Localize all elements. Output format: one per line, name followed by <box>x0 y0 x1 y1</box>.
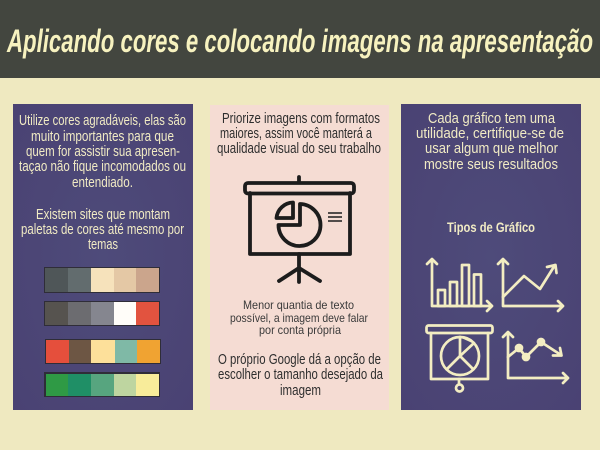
text block: utilidade dos gráficos: Cada gráfico tem uma <box>428 111 556 127</box>
text block: cores agradáveis: entendiado. <box>72 175 133 191</box>
text block: sites de paletas: paletas de cores até mesmo por <box>21 222 184 238</box>
text block: formatos maiores: maiores, assim você manterá a <box>220 126 373 142</box>
palette 4 <box>44 372 160 397</box>
text block: cores agradáveis: taçao não fique incomodados ou <box>19 159 186 175</box>
panel: gráficos <box>401 104 581 410</box>
icon: dotted line chart <box>503 332 568 383</box>
text block: sites de paletas: temas <box>88 237 118 253</box>
text block: sites de paletas <box>21 207 184 253</box>
text block: opção do Google: O próprio Google dá a opção de <box>218 352 381 368</box>
palette 2 <box>44 301 160 326</box>
text block: cores agradáveis: Utilize cores agradáveis, elas são <box>19 113 186 129</box>
header band <box>0 0 600 78</box>
text block: formatos maiores <box>217 111 381 157</box>
text block: opção do Google: escolher o tamanho desejado da <box>218 367 384 383</box>
palette 1 <box>44 267 160 293</box>
text block: utilidade dos gráficos: mostre seus resultados <box>424 157 558 173</box>
text block: formatos maiores: qualidade visual do seu trabalho <box>217 141 381 157</box>
panel: cores <box>13 104 193 410</box>
icon: presentation board with pie <box>426 326 492 392</box>
caption: menos texto: possível, a imagem deve falar <box>230 311 368 325</box>
heading: tipos de gráfico: Tipos de Gráfico <box>447 219 535 235</box>
palette 3 <box>45 339 161 364</box>
icon: bar chart <box>427 259 492 311</box>
icon: projector with pie chart <box>245 177 354 282</box>
caption: menos texto: por conta própria <box>259 323 341 337</box>
text block: sites de paletas: Existem sites que montam <box>36 207 170 223</box>
caption: menos texto <box>230 298 368 337</box>
text block: cores agradáveis: muito importantes para que <box>31 129 174 145</box>
text block: opção do Google: imagem <box>280 383 321 399</box>
text block: utilidade dos gráficos: usar algum que melhor <box>425 141 558 157</box>
text block: opção do Google <box>218 352 384 399</box>
text block: utilidade dos gráficos <box>416 111 564 173</box>
icon: line chart <box>498 259 563 311</box>
text block: cores agradáveis: quem for assistir sua apresen- <box>26 144 180 160</box>
caption: menos texto: Menor quantia de texto <box>243 298 354 312</box>
text block: utilidade dos gráficos: utilidade, certifique-se de <box>416 126 564 142</box>
text block: cores agradáveis <box>19 113 186 191</box>
text block: formatos maiores: Priorize imagens com formatos <box>222 111 380 127</box>
panel: imagens <box>210 105 389 410</box>
